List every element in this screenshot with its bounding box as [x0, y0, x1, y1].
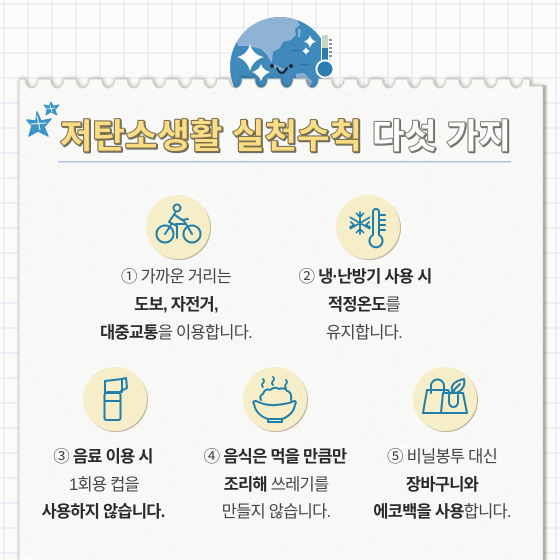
text: item 3 [41, 447, 165, 521]
text: item 5: ⑤ 비닐봉투 대신 [387, 447, 497, 466]
title: 다섯 가지 [372, 118, 511, 156]
text: item 2: ② 냉·난방기 사용 시 [298, 267, 432, 286]
text: item 5: 에코백을 사용합니다. [373, 502, 511, 521]
icon: sparkles [237, 35, 316, 81]
icon: tumbler [83, 367, 147, 431]
text: item 4: 조리해 쓰레기를 [224, 475, 329, 494]
text: item 4 [204, 447, 347, 521]
text: item 3: 1회용 컵을 [69, 475, 140, 494]
icon: smiling face [270, 64, 293, 73]
text: item 4: 만들지 않습니다. [222, 502, 331, 521]
text: item 1: 도보, 자전거, [134, 295, 218, 314]
icon: shopping bags [413, 367, 477, 431]
text: item 1 [100, 267, 252, 342]
text: item 3: 사용하지 않습니다. [41, 502, 165, 521]
text: item 2 [298, 267, 432, 342]
icon: blue stars [27, 102, 59, 136]
text: item 2: 적정온도를 [328, 295, 401, 314]
land masses [237, 17, 300, 62]
item 3: reusable cup [41, 367, 165, 521]
item 1: walking and cycling [100, 195, 252, 342]
text: item 5: 장바구니와 [406, 475, 479, 494]
globe mascot [230, 15, 334, 92]
icon: thermometer [316, 34, 334, 78]
item 2: heating and cooling [298, 195, 432, 342]
icon: snowflake and thermometer [336, 195, 400, 259]
text: item 1: 대중교통을 이용합니다. [100, 323, 252, 342]
item 4: food portions [204, 367, 347, 521]
text: item 3: ③ 음료 이용 시 [53, 447, 153, 466]
item 5: eco bags [373, 367, 511, 521]
text: item 1: ① 가까운 거리는 [121, 267, 232, 286]
title: 저탄소생활 실천수칙 [60, 118, 362, 156]
icon: bicycle [146, 195, 210, 259]
text: item 2: 유지합니다. [326, 323, 402, 342]
icon: rice bowl [243, 367, 307, 431]
text: item 5 [373, 447, 511, 521]
title [60, 118, 511, 156]
text: item 4: ④ 음식은 먹을 만큼만 [204, 447, 347, 466]
